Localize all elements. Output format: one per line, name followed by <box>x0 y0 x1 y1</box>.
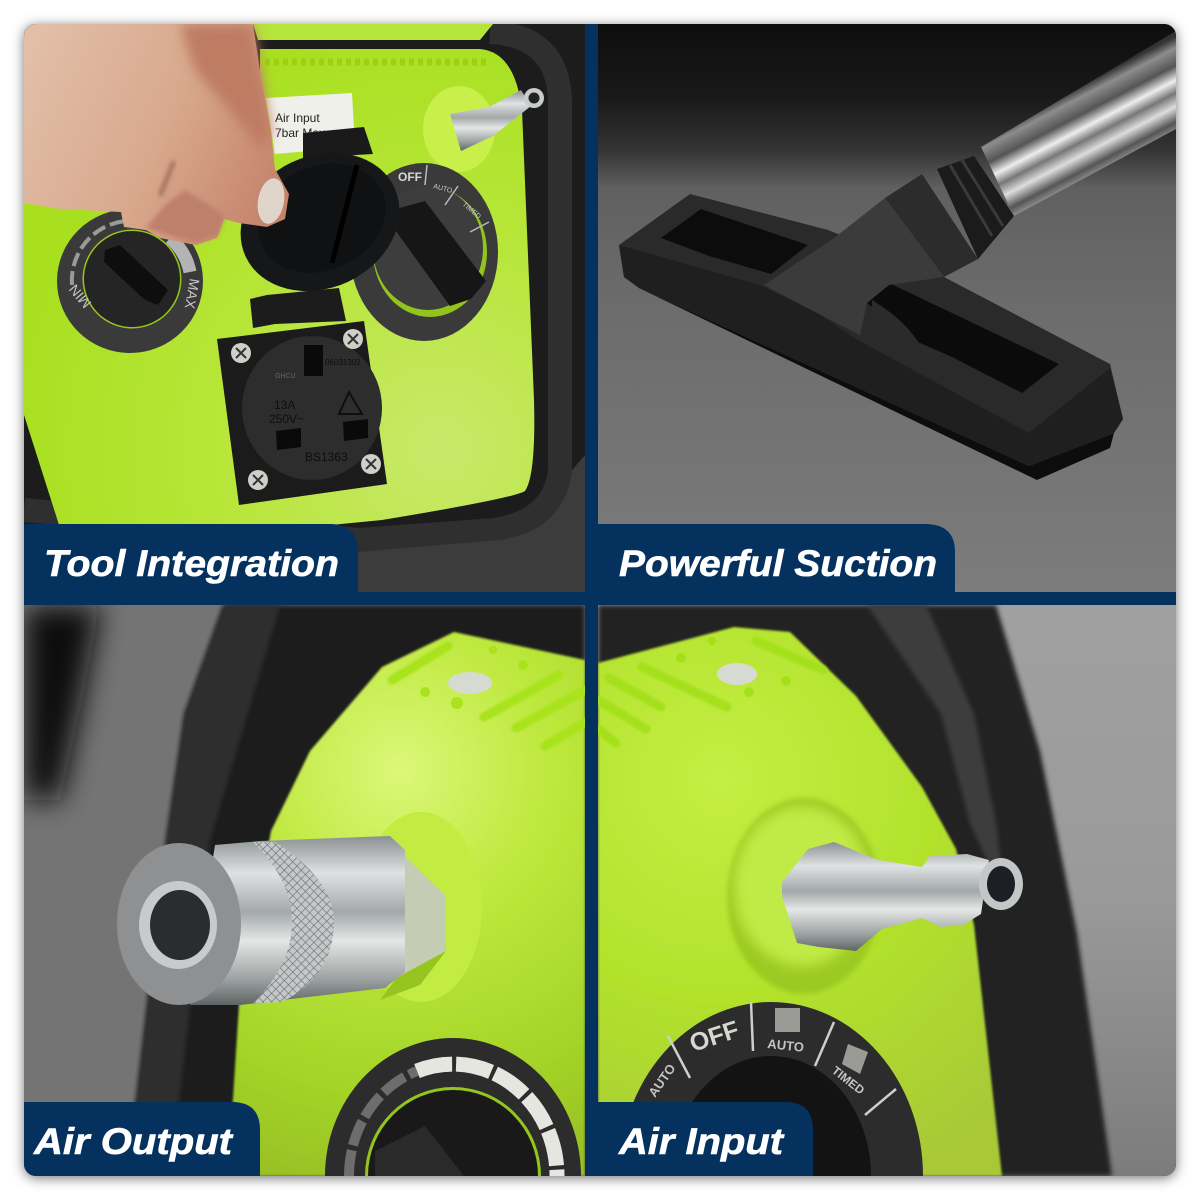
vent dots <box>676 637 791 697</box>
green housing <box>598 627 1002 1176</box>
panel: air input <box>598 605 1176 1176</box>
panel: tool integration <box>24 24 585 592</box>
green control panel <box>24 49 534 528</box>
label tab: tool integration: Tool Integration <box>44 543 339 584</box>
air output coupling <box>117 812 482 1005</box>
socket: GHCU <box>275 373 296 380</box>
vent slats <box>598 641 823 743</box>
label tab: powerful suction <box>585 524 955 592</box>
green housing <box>228 632 585 1176</box>
screw <box>448 672 492 694</box>
right dial <box>350 163 498 341</box>
label tab: air input: Air Input <box>618 1121 785 1162</box>
socket: BS1363 <box>305 450 348 464</box>
MAX label: MAX <box>182 277 203 311</box>
MIN label: MIN <box>66 281 94 311</box>
socket: 250V~ <box>269 412 304 426</box>
selector dial: OFF <box>686 1016 742 1058</box>
housing rim <box>24 32 560 540</box>
label tab: air input <box>585 1102 813 1176</box>
socket: 06031302 <box>325 358 361 367</box>
vent slats <box>392 646 585 746</box>
vent ribs <box>265 58 490 66</box>
lower dial <box>325 1038 581 1176</box>
selector dial: AUTO <box>645 1061 678 1100</box>
upper green strip <box>253 24 493 40</box>
air input fitting <box>423 86 544 172</box>
selector dial: TIMED <box>829 1063 867 1098</box>
hand <box>24 24 289 245</box>
vent dots <box>420 646 528 709</box>
label tab: air output: Air Output <box>33 1121 234 1162</box>
label tab: tool integration <box>24 524 358 592</box>
right dial: TIMED <box>461 201 482 221</box>
air input sticker: 7bar Max <box>275 126 325 140</box>
black housing <box>128 605 585 1176</box>
selector dial: AUTO <box>767 1036 805 1055</box>
black housing <box>598 605 1112 1176</box>
socket <box>217 321 387 505</box>
selector dial <box>619 1002 923 1176</box>
chrome tube <box>981 31 1176 216</box>
socket cover <box>240 127 400 328</box>
screw <box>717 663 757 685</box>
panel: air output <box>24 605 585 1176</box>
label tab: air output <box>24 1102 260 1176</box>
label tab: powerful suction: Powerful Suction <box>619 543 937 584</box>
air input sticker <box>266 93 355 154</box>
air input fitting <box>727 798 1023 994</box>
air input sticker: Air Input <box>275 111 320 125</box>
right dial: AUTO <box>432 183 453 195</box>
left dial <box>57 209 203 353</box>
floor head <box>619 156 1123 480</box>
right dial: OFF <box>398 170 422 184</box>
socket: 13A <box>274 398 295 412</box>
panel: powerful suction <box>598 24 1176 592</box>
